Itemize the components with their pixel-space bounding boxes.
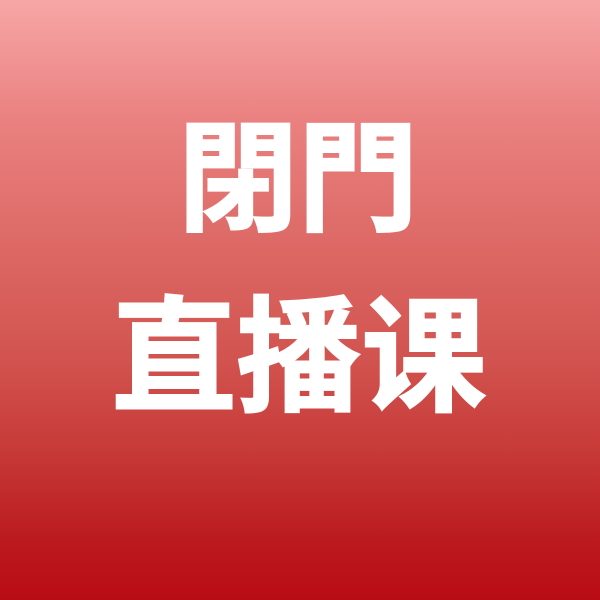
title line 2: 直播课 [112, 289, 486, 428]
title line 1: 閉門 [178, 113, 418, 247]
